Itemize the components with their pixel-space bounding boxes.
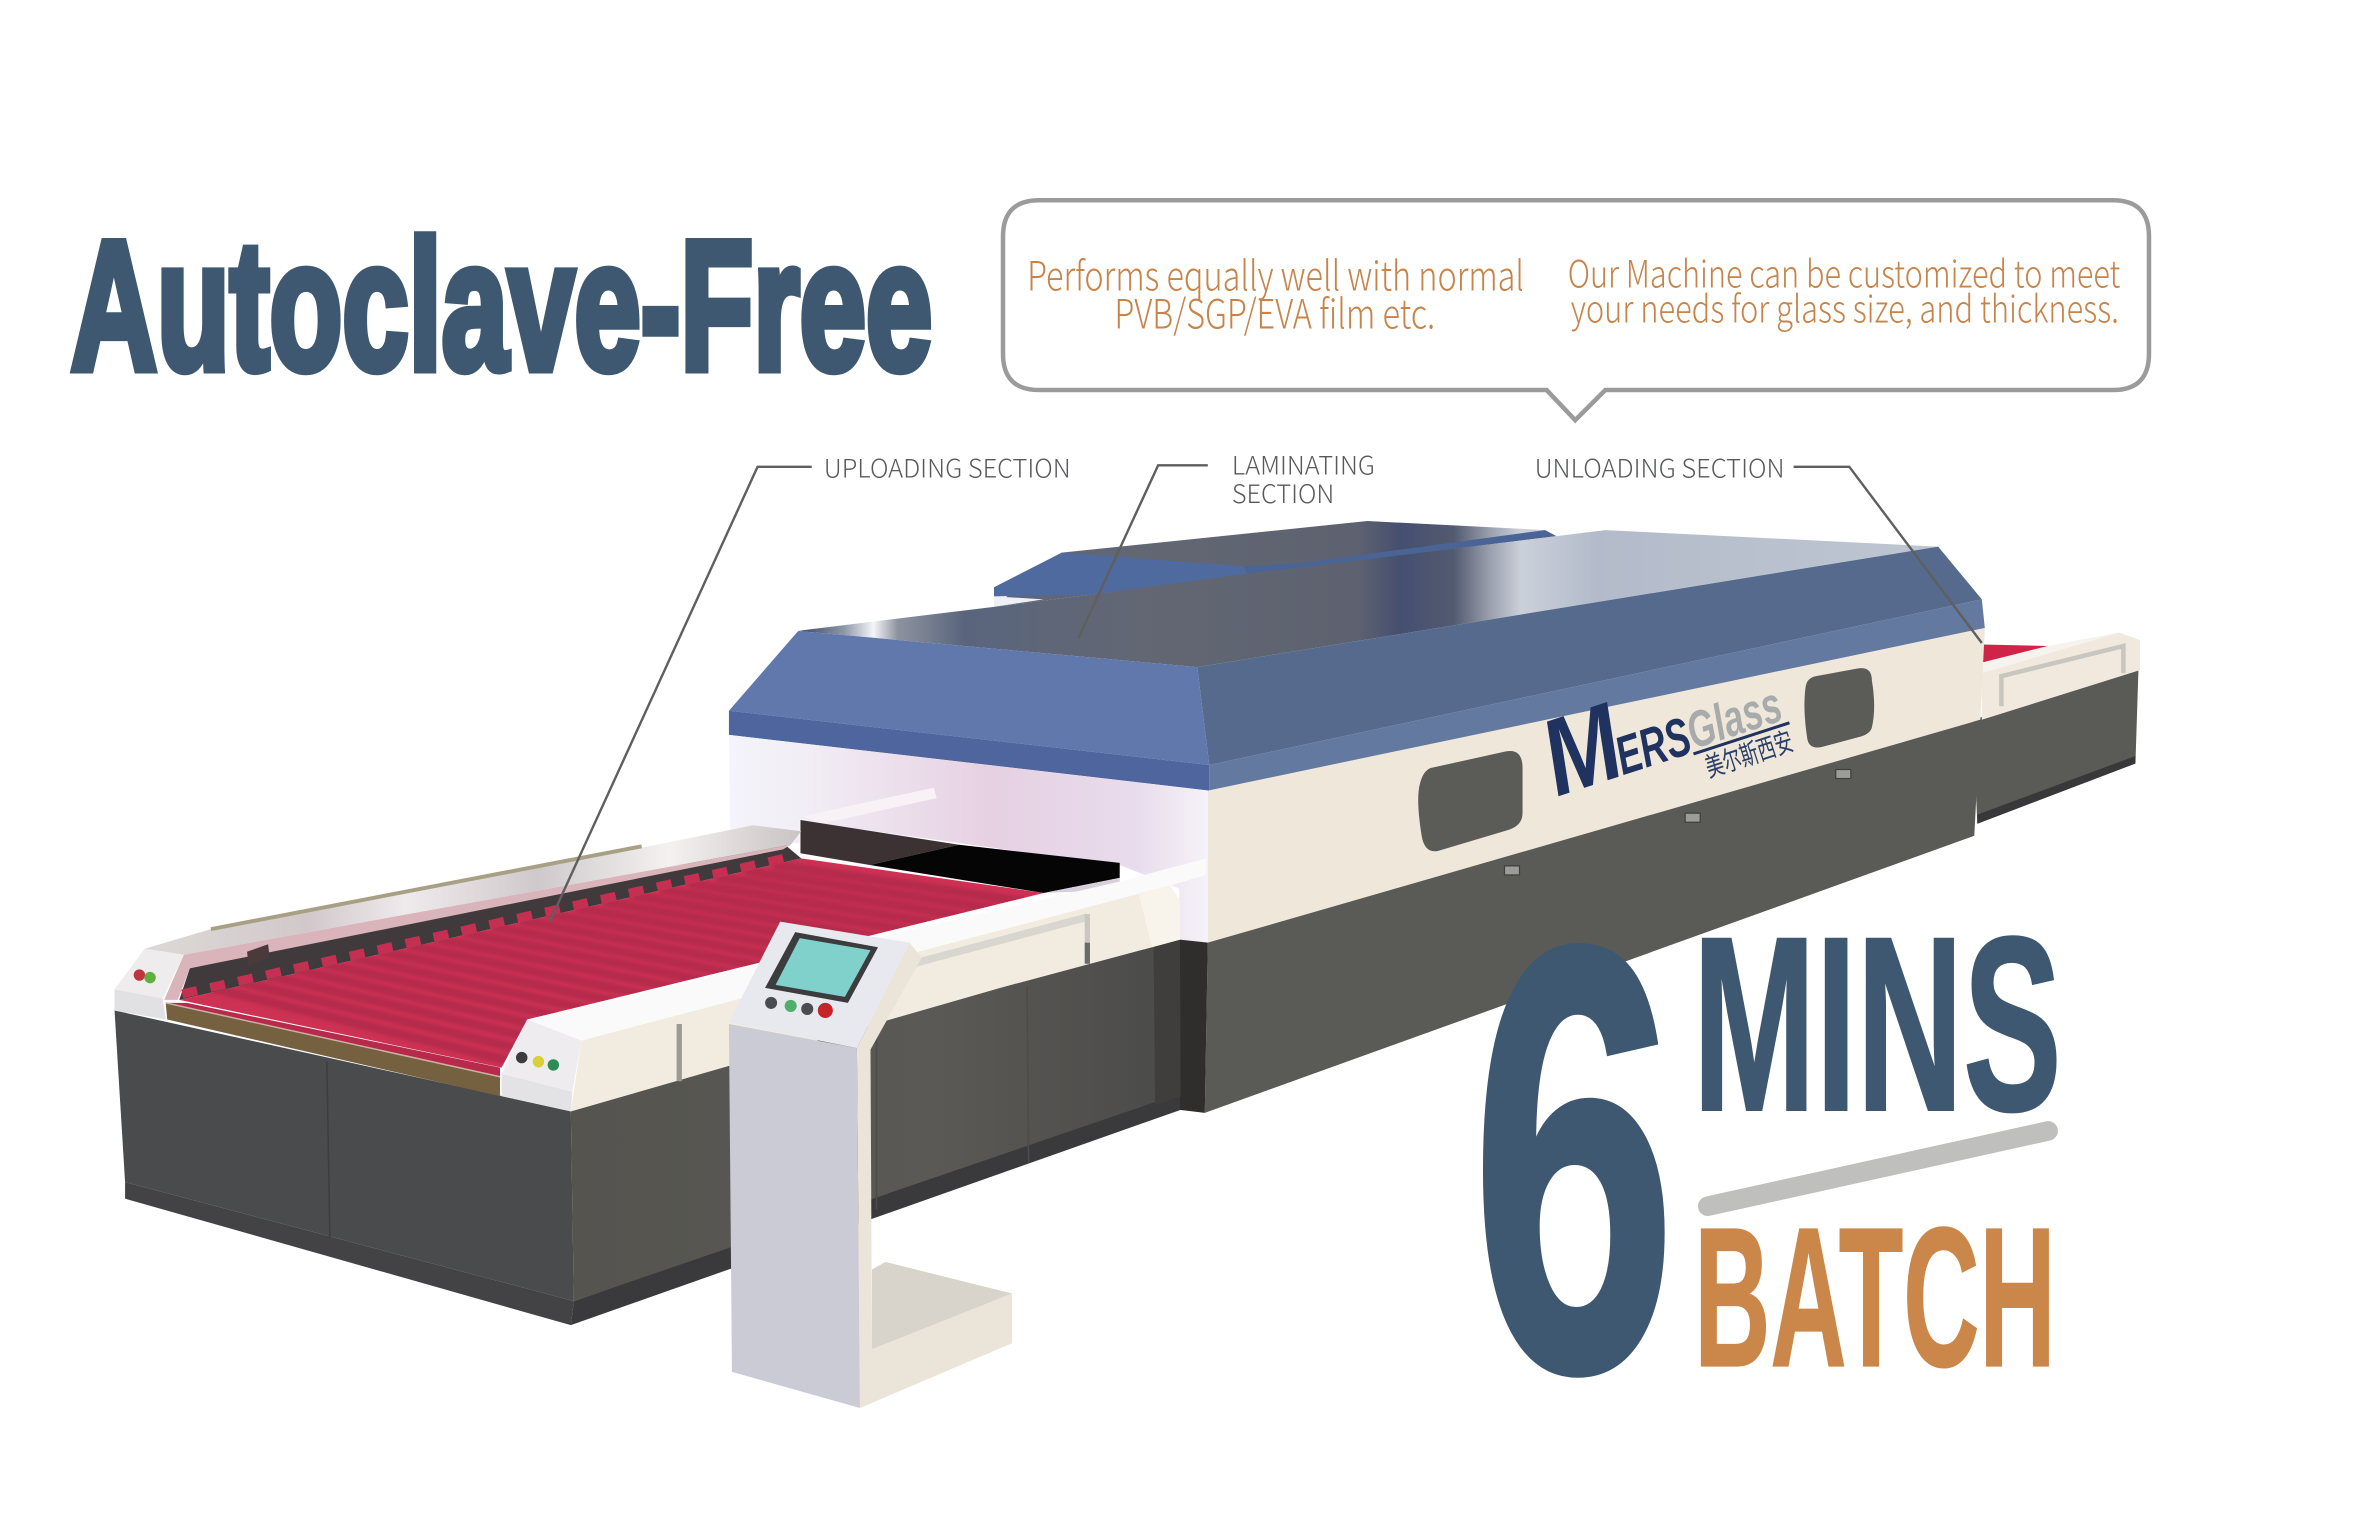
back rail [145, 825, 801, 1000]
front conveyor side cabinet [571, 940, 1181, 1301]
front highlight stripe [803, 788, 937, 824]
kiosk screen [765, 932, 878, 1003]
label: uploading section: UPLOADING SECTION [824, 448, 1071, 485]
text: customization [1568, 244, 2120, 333]
text: customization: your needs for glass size, and thickness. [1571, 278, 2119, 333]
label: unloading section: UNLOADING SECTION [1535, 448, 1785, 485]
front conveyor base side [571, 1093, 1181, 1325]
label: laminating section: SECTION [1232, 474, 1334, 511]
hood top face [798, 530, 1938, 667]
kiosk side [857, 943, 1012, 1408]
kiosk foot top [872, 1262, 1012, 1349]
rear hood [994, 521, 1556, 607]
right corner block [502, 1019, 581, 1111]
text: customization: Our Machine can be customized to meet [1568, 244, 2120, 299]
hood front band [729, 711, 1209, 791]
divider slash [1708, 1131, 2048, 1206]
front trim [166, 1003, 500, 1096]
callout: speech bubble [1003, 200, 2149, 420]
rail end cap [1139, 885, 1180, 947]
hood side band [1209, 599, 1985, 791]
laminating body side [1208, 628, 1985, 943]
label: laminating section [1232, 445, 1375, 511]
text: film compatibility [1027, 244, 1524, 340]
leader: uploading section [550, 467, 812, 922]
bubble outline with tail [1003, 200, 2149, 420]
tunnel opening [800, 820, 1120, 893]
title: Autoclave-Free [71, 203, 932, 408]
label: laminating section: LAMINATING [1232, 445, 1375, 482]
laminating body base [1205, 720, 1980, 1113]
roller conveyor bed [180, 854, 1044, 1068]
viewing windows [1418, 668, 1874, 851]
logo: MersGlass: Glass [1679, 676, 1789, 760]
rail handles [679, 914, 1087, 1081]
logo: MersGlass: 美尔斯西安 [1701, 726, 1797, 783]
logo: MersGlass: M [1527, 680, 1638, 819]
control kiosk [729, 922, 1012, 1408]
leader: laminating section [1078, 465, 1208, 638]
hood front face [729, 631, 1209, 765]
text: film compatibility: Performs equally well with normal [1027, 244, 1524, 303]
kiosk front [729, 1024, 860, 1408]
front rail side [571, 885, 1180, 1111]
kiosk panel [729, 922, 910, 1048]
text: film compatibility: PVB/SGP/EVA film etc. [1114, 281, 1435, 340]
latches [1504, 770, 1851, 875]
rear conveyor [1973, 632, 2140, 824]
leader: unloading section [1794, 467, 1982, 643]
logo: MersGlass [1527, 628, 1800, 830]
word: mins: MINS [1693, 885, 2062, 1163]
hood sloped side [1197, 547, 1982, 765]
left corner block [115, 949, 184, 1019]
roller tooth gap [179, 843, 801, 1000]
word: batch: BATCH [1694, 1187, 2056, 1409]
stat: 6 mins batch [1471, 822, 2062, 1498]
laminating pillar [1180, 940, 1208, 1113]
machine illustration [115, 521, 2140, 1408]
laminating body front [729, 735, 1208, 943]
front conveyor base front [125, 1182, 574, 1325]
front rail top [527, 858, 1206, 1041]
logo: MersGlass: ERS [1608, 706, 1698, 787]
front conveyor front cabinet [115, 1010, 574, 1301]
kiosk buttons [765, 997, 833, 1018]
number 6: 6 [1471, 822, 1676, 1498]
